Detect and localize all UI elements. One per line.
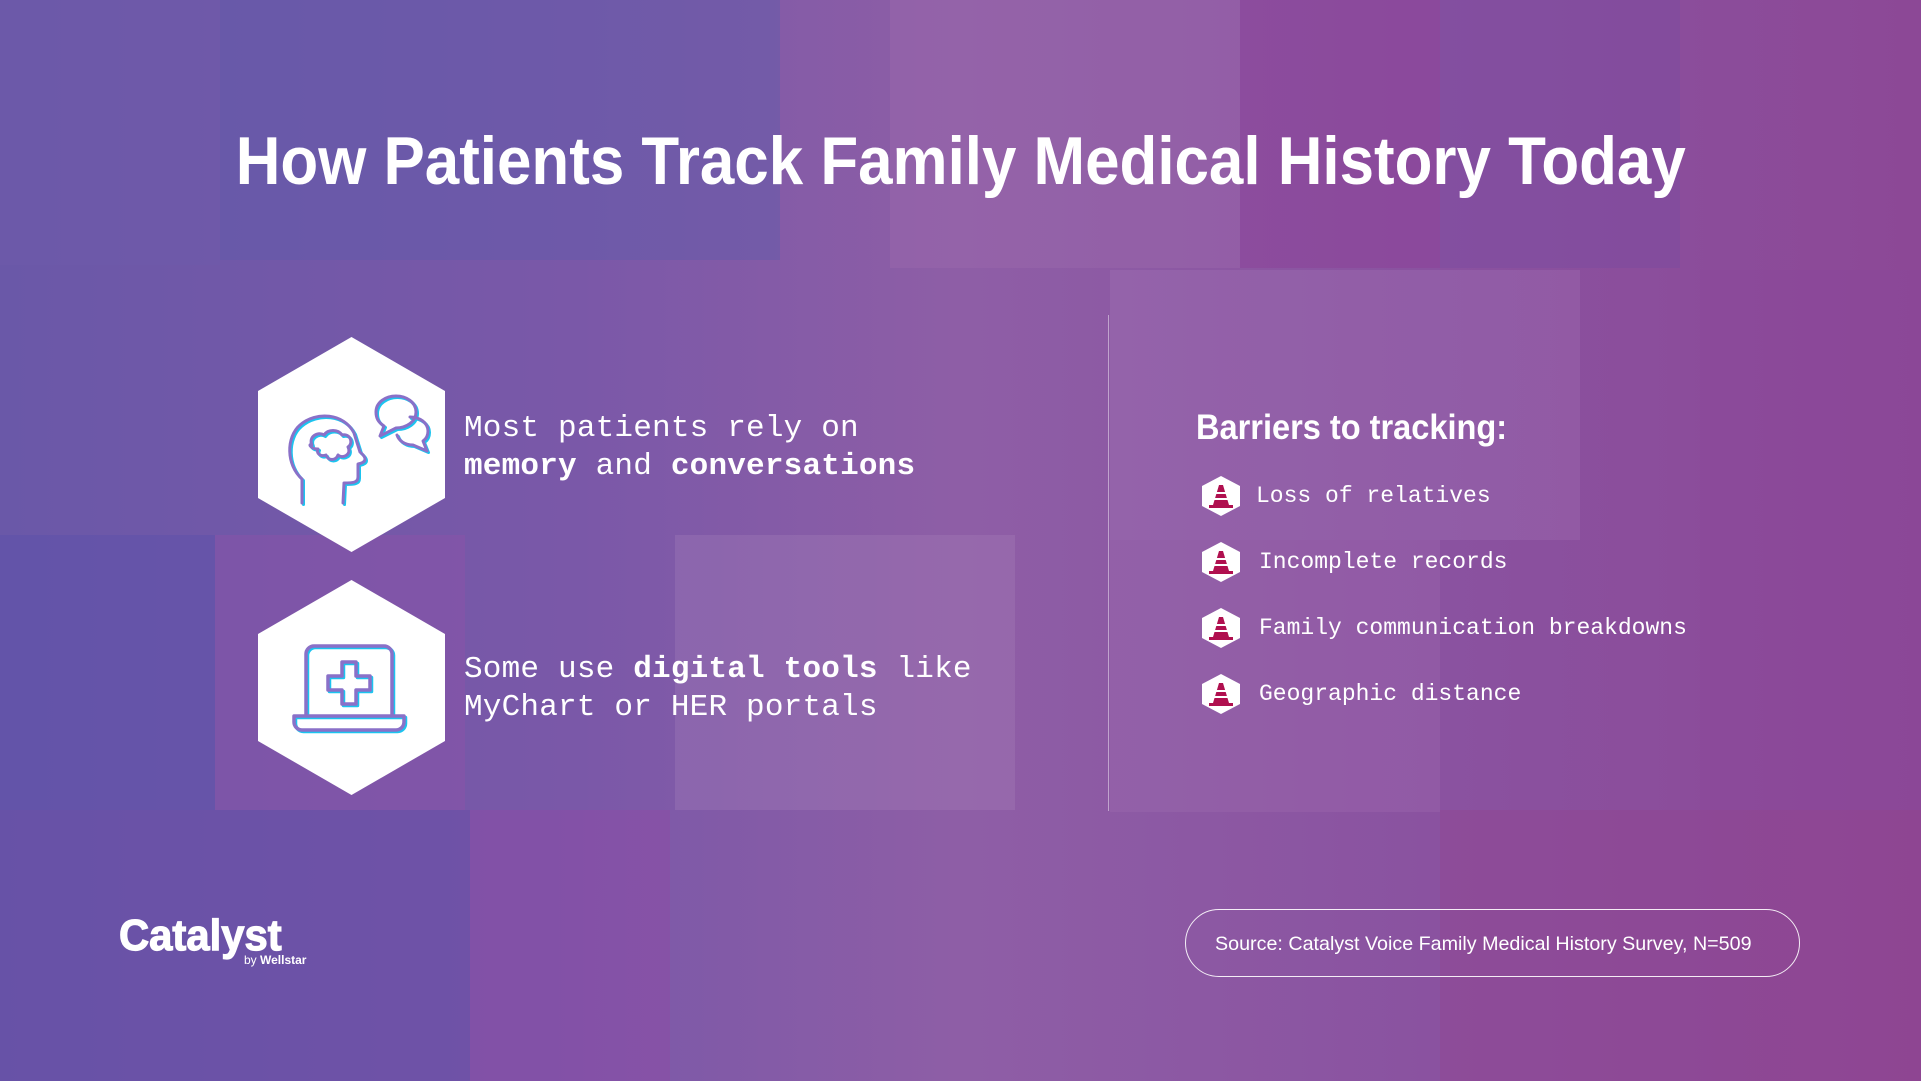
icon: laptop with medical cross hexagon (258, 580, 445, 795)
text block: digital tools: MyChart or HER portals (464, 690, 878, 725)
title: How Patients Track Family Medical History Today (235, 123, 1686, 199)
list: barriers (1202, 476, 1687, 714)
item: geographic distance (1202, 674, 1521, 714)
item: incomplete records (1202, 542, 1507, 582)
text block: memory: Most patients rely on (464, 411, 859, 446)
logo: Catalyst by Wellstar: by Wellstar (244, 953, 306, 967)
text block: digital tools (464, 652, 972, 725)
text block: digital tools: Some use digital tools like (464, 652, 972, 687)
item: loss of relatives: Loss of relatives (1256, 483, 1491, 509)
source pill (1185, 909, 1800, 977)
text block: memory: memory and conversations (464, 449, 915, 484)
heading: barriers: Barriers to tracking: (1196, 408, 1507, 447)
item: family communication: Family communication breakdowns (1259, 615, 1687, 641)
logo: Catalyst by Wellstar: Catalyst (119, 911, 282, 960)
item: geographic distance: Geographic distance (1259, 681, 1521, 707)
item: loss of relatives (1202, 476, 1491, 516)
text block: memory (464, 411, 915, 484)
item: incomplete records: Incomplete records (1259, 549, 1507, 575)
source pill: Source: Catalyst Voice Family Medical History Survey, N=509 (1215, 933, 1752, 955)
item: family communication (1202, 608, 1687, 648)
icon: head with speech bubbles hexagon (258, 337, 445, 552)
